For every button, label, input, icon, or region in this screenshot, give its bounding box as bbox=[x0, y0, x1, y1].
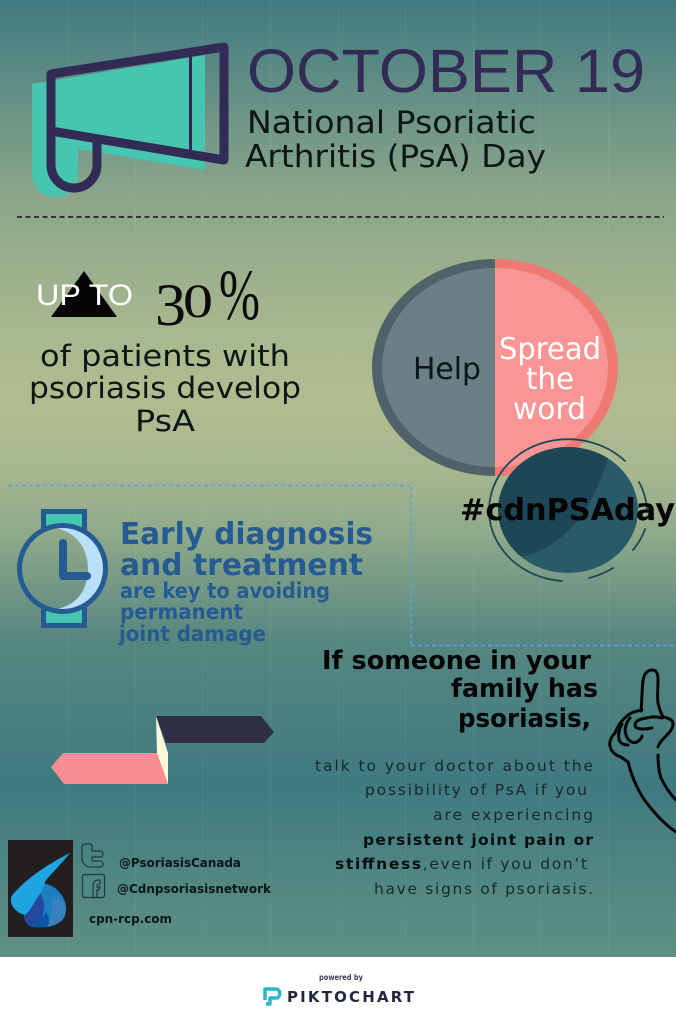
label: spread the word bbox=[499, 332, 601, 427]
number: 30%: % bbox=[219, 255, 260, 335]
hashtag text: #cdnPSAday bbox=[460, 493, 675, 528]
icon: facebook bbox=[82, 874, 104, 898]
text: early diagnosis bbox=[118, 517, 373, 646]
number: 30%: 3 bbox=[155, 272, 186, 338]
text: early diagnosis: are key to avoiding bbox=[120, 579, 330, 603]
text: social handles bbox=[89, 855, 272, 926]
text: advice: have signs of psoriasis. bbox=[374, 880, 593, 898]
text: advice: are experiencing bbox=[433, 806, 593, 824]
label: spread the word: word bbox=[513, 392, 586, 427]
text: social handles: @PsoriasisCanada bbox=[119, 855, 241, 870]
icon: twitter bbox=[82, 844, 103, 867]
text: advice bbox=[315, 757, 593, 898]
subtitle: Arthritis (PsA) Day bbox=[245, 139, 546, 175]
arrows bbox=[51, 716, 274, 784]
statistic: up to 30% bbox=[36, 255, 260, 338]
text: patients statistic bbox=[29, 339, 301, 438]
label: up to: UP TO bbox=[36, 279, 133, 312]
subtitle bbox=[245, 105, 546, 175]
label: spread the word: the bbox=[526, 362, 574, 397]
text: social handles: cpn-rcp.com bbox=[89, 911, 172, 926]
icon: megaphone bbox=[32, 47, 224, 197]
label: help: Help bbox=[413, 352, 481, 387]
text: early diagnosis: joint damage bbox=[118, 622, 266, 646]
icon: triangle bbox=[51, 271, 117, 317]
icon: watch bbox=[20, 512, 106, 626]
text: early diagnosis: permanent bbox=[120, 600, 243, 624]
subtitle: National Psoriatic bbox=[247, 105, 536, 141]
label: spread the word: Spread bbox=[499, 332, 601, 367]
footer: powered by piktochart: powered by bbox=[319, 973, 363, 982]
logo bbox=[8, 840, 73, 937]
text: social handles: @Cdnpsoriasisnetwork bbox=[117, 881, 272, 896]
text: patients statistic: PsA bbox=[135, 404, 195, 438]
text: advice: persistent joint pain or bbox=[363, 831, 593, 849]
hashtag circle bbox=[460, 430, 675, 581]
text: early diagnosis: and treatment bbox=[120, 548, 363, 583]
text: advice: possibility of PsA if you bbox=[365, 781, 587, 799]
icon: pointing hand bbox=[610, 670, 676, 832]
text: early diagnosis: Early diagnosis bbox=[120, 517, 373, 552]
chart: help / spread the word circle bbox=[372, 259, 618, 476]
number: 30%: 0 bbox=[183, 275, 213, 328]
text: family heading: If someone in your bbox=[322, 646, 591, 676]
footer: powered by piktochart: PIKTOCHART bbox=[287, 988, 415, 1006]
text: family heading bbox=[322, 646, 598, 734]
text: advice: stiffness,even if you don’t bbox=[335, 855, 587, 873]
footer: powered by piktochart bbox=[265, 973, 415, 1006]
text: patients statistic: psoriasis develop bbox=[29, 371, 301, 405]
text: family heading: psoriasis, bbox=[458, 704, 591, 734]
icon: piktochart logo bbox=[265, 989, 280, 1004]
text: advice: talk to your doctor about the bbox=[315, 757, 593, 775]
number: 30% bbox=[155, 255, 260, 338]
title: date: OCTOBER 19 bbox=[247, 37, 645, 105]
text: patients statistic: of patients with bbox=[40, 339, 290, 373]
text: family heading: family has bbox=[451, 674, 598, 704]
